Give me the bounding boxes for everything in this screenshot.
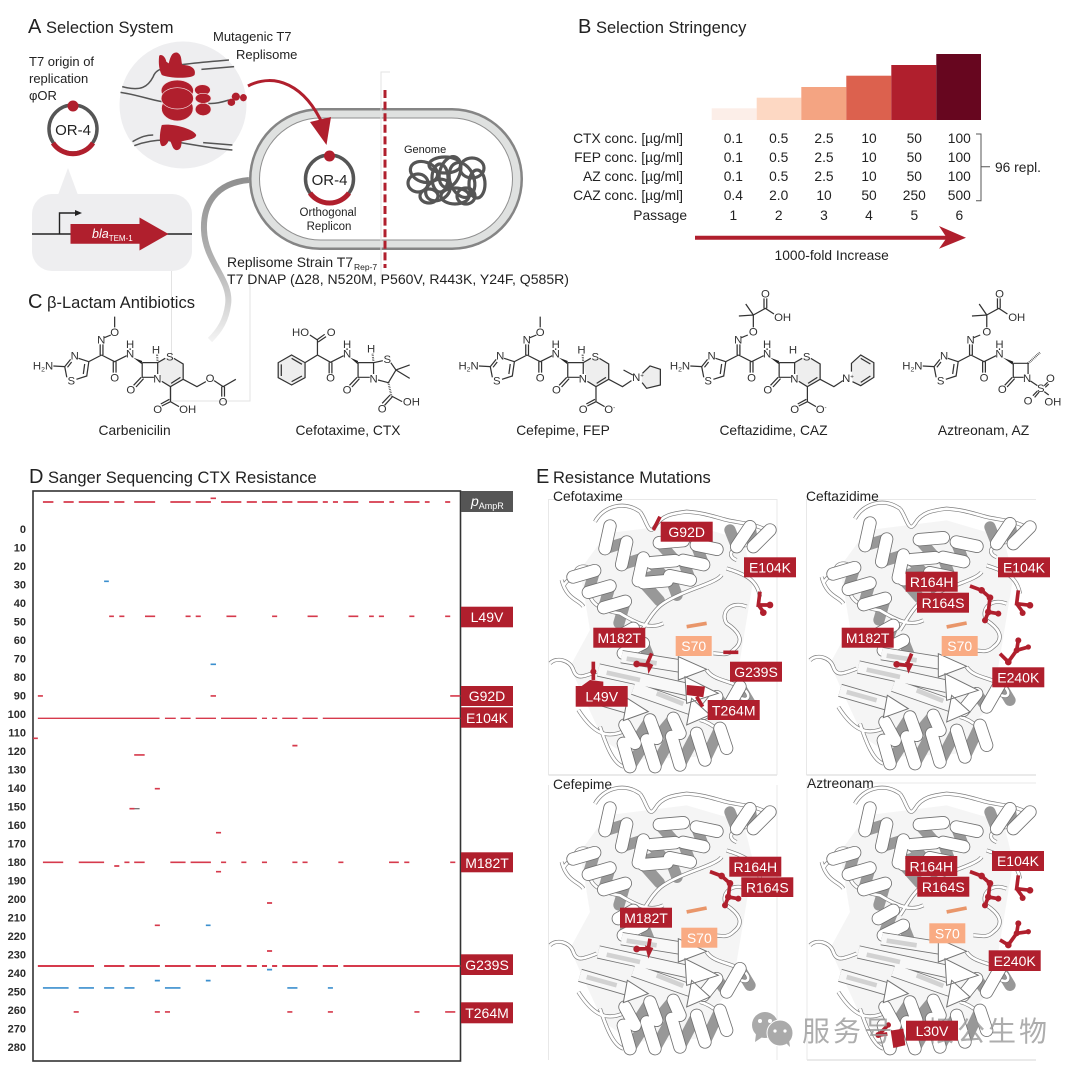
panel: cefepime: [550, 777, 793, 1049]
molecule: aztreonam: H: [902, 361, 910, 373]
molecule: cefepime: O: [552, 385, 561, 397]
molecule: aztreonam: O: [1046, 373, 1055, 385]
molecule: ceftazidime: H: [789, 345, 797, 357]
position axis: 20: [14, 561, 26, 573]
panel E: resistance mutations: [536, 466, 1050, 1060]
molecule: cefotaxime: N: [369, 374, 378, 386]
molecule: carbenicillin: N: [153, 374, 161, 386]
molecule names: Cefepime, FEP: [516, 423, 610, 438]
molecule: cefotaxime: HO: [292, 327, 309, 339]
molecule: carbenicillin: [33, 317, 236, 416]
molecule: cefotaxime: N: [343, 349, 351, 361]
label: T264M: T264M: [465, 1005, 509, 1021]
cell tail: [204, 180, 249, 340]
label: replisome strain: T7 DNAP (Δ28, N520M, P560V, R443K, Y24F, Q585R): [227, 272, 569, 287]
label: mutagenic T7 replisome: Replisome: [236, 47, 297, 62]
icon: OR-4 orthogonal replicon: [306, 150, 354, 203]
labels: T264M: [712, 702, 755, 718]
position axis: 0: [20, 524, 26, 536]
molecule: cefepime: O: [604, 404, 613, 416]
molecule names: Carbenicilin: [99, 423, 171, 438]
table: concentrations: 0.5: [769, 131, 789, 146]
labels: E240K: [997, 670, 1040, 686]
table: concentrations: 100: [948, 169, 971, 184]
molecule names: Ceftazidime, CAZ: [719, 423, 828, 438]
table: concentrations: 50: [907, 169, 922, 184]
subheading: Cefepime: [553, 777, 612, 792]
molecule: cefepime: S: [592, 351, 599, 363]
molecule: ceftazidime: +: [850, 374, 854, 381]
position axis: [8, 524, 26, 1054]
molecule: carbenicillin: H: [152, 345, 160, 357]
protein ribbon: [550, 788, 773, 1049]
subheading: Ceftazidime: [806, 489, 879, 504]
labels: M182T: [598, 630, 642, 646]
molecule: ceftazidime: N: [842, 373, 850, 385]
table: concentrations: 3: [820, 208, 828, 223]
molecule: carbenicillin: N: [126, 349, 134, 361]
cell outline: [249, 108, 523, 250]
table: concentrations: 100: [948, 150, 971, 165]
heading E: E: [536, 466, 549, 488]
labels: S70: [681, 638, 706, 654]
molecule: ceftazidime: O: [790, 404, 799, 416]
position axis: 50: [14, 616, 26, 628]
molecule: ceftazidime: N: [708, 351, 716, 363]
molecule: carbenicillin: N: [45, 361, 53, 373]
label: T264M: [461, 1002, 513, 1023]
labels: [620, 857, 793, 948]
heading C: C: [28, 291, 42, 313]
molecule: carbenicillin: OH: [179, 404, 196, 416]
heading D: D: [29, 466, 43, 488]
position axis: 180: [8, 857, 26, 869]
molecule: carbenicillin: H: [126, 339, 134, 351]
label: orthogonal replicon: [300, 207, 356, 233]
molecule: cefotaxime: S: [384, 354, 391, 366]
molecule: cefotaxime: O: [326, 372, 335, 384]
molecule: cefepime: N: [552, 349, 560, 361]
arrow: replisome to replicon: [248, 81, 331, 145]
molecule: aztreonam: [902, 289, 1061, 408]
molecule: cefotaxime: H: [367, 344, 375, 356]
heading B: B: [578, 16, 591, 38]
heading C: β-Lactam Antibiotics: [47, 294, 195, 312]
molecule: ceftazidime: 2: [678, 367, 682, 374]
labels: L30V: [916, 1023, 949, 1039]
table: concentrations: 1: [729, 208, 737, 223]
labels: G92D: [668, 524, 705, 540]
molecule: cefepime: N: [471, 361, 479, 373]
table: concentrations: CAZ conc. [µg/ml]: [573, 188, 683, 203]
table: concentrations: 50: [907, 131, 922, 146]
panel A: selection system: [28, 16, 569, 401]
heading A: Selection System: [46, 19, 173, 37]
labels: G239S: [734, 664, 778, 680]
molecule: carbenicillin: O: [153, 404, 162, 416]
molecule: ceftazidime: N: [790, 374, 798, 386]
molecule: aztreonam: N: [914, 361, 923, 373]
icon: genome tangle: [407, 154, 485, 205]
icon: OR-4 replicon small: [49, 100, 97, 154]
label: L49V: L49V: [471, 609, 504, 625]
molecule: cefepime: [458, 317, 660, 416]
subheading: Aztreonam: [807, 776, 874, 791]
molecule: cefepime: H: [552, 339, 560, 351]
molecule names: Aztreonam, AZ: [938, 423, 1029, 438]
molecule: ceftazidime: O: [749, 326, 758, 338]
labels: R164H: [910, 858, 953, 874]
table: concentrations: 250: [903, 188, 926, 203]
molecule: aztreonam: OH: [1044, 396, 1061, 408]
position axis: 230: [8, 950, 26, 962]
labels: R164S: [922, 595, 964, 611]
position axis: 10: [14, 542, 26, 554]
position axis: 220: [8, 931, 26, 943]
panel C: beta-lactam antibiotics: [28, 289, 1061, 438]
bracket: 96 replicates: 96 repl.: [995, 160, 1041, 175]
position axis: 130: [8, 764, 26, 776]
position axis: 140: [8, 783, 26, 795]
molecule: carbenicillin: N: [71, 351, 79, 363]
label: genome: Genome: [404, 144, 446, 156]
molecule: ceftazidime: N: [763, 349, 771, 361]
molecule: ceftazidime: S: [704, 375, 712, 387]
labels: [905, 851, 1044, 1041]
table: concentrations: 10: [816, 188, 832, 203]
label: G239S: [461, 954, 513, 975]
molecule: carbenicillin: S: [67, 375, 75, 387]
label: M182T: [461, 852, 513, 872]
table: concentrations: 2.5: [814, 131, 834, 146]
label: pAmpR: AmpR: [479, 501, 504, 511]
molecule: ceftazidime: [670, 289, 874, 416]
panel: ceftazidime: [806, 489, 1050, 764]
label: G239S: G239S: [465, 957, 509, 973]
position axis: 120: [8, 746, 26, 758]
molecule: carbenicillin: O: [110, 327, 119, 339]
label: mutagenic T7 replisome: Mutagenic T7: [213, 29, 292, 44]
molecule: ceftazidime: H: [763, 339, 771, 351]
position axis: 250: [8, 986, 26, 998]
molecule: cefepime: S: [493, 375, 501, 387]
molecule: ceftazidime: N: [734, 335, 742, 347]
position axis: 210: [8, 912, 26, 924]
labels: R164S: [746, 880, 789, 896]
molecule: carbenicillin: S: [166, 351, 174, 363]
molecule: cefepime: 2: [467, 367, 471, 374]
callout: bla TEM-1 gene: [32, 168, 192, 271]
molecule: aztreonam: O: [995, 289, 1004, 301]
molecule: aztreonam: S: [937, 375, 944, 387]
table: concentrations: [573, 131, 971, 223]
labels: S70: [687, 930, 712, 946]
panel B: selection stringency: [573, 16, 1041, 263]
labels: S70: [947, 638, 972, 654]
position axis: 160: [8, 820, 26, 832]
molecule: ceftazidime: O: [763, 385, 773, 397]
molecule: aztreonam: O: [982, 326, 991, 338]
molecule: cefotaxime: O: [343, 385, 352, 397]
label: E104K: [461, 707, 513, 728]
molecule: aztreonam: N: [940, 351, 948, 363]
table: concentrations: 50: [861, 188, 877, 203]
position axis: 80: [14, 672, 26, 684]
table: concentrations: 500: [948, 188, 971, 203]
protein ribbon: [810, 503, 1033, 764]
label: pAmpR: p: [471, 493, 479, 509]
molecule: cefepime: O: [536, 372, 545, 384]
molecule: aztreonam: O: [980, 372, 989, 384]
molecule: cefepime: H: [458, 361, 467, 373]
table: concentrations: 5: [910, 208, 918, 223]
table: concentrations: 50: [907, 150, 922, 165]
molecule: carbenicillin: O: [219, 396, 228, 408]
position axis: 150: [8, 802, 26, 814]
replisome circle: [120, 42, 247, 168]
molecule: cefepime: N: [523, 335, 531, 347]
molecule: aztreonam: 2: [910, 367, 915, 374]
molecule names: [99, 423, 1029, 438]
molecule: carbenicillin: H: [33, 361, 41, 373]
table: concentrations: AZ conc. [µg/ml]: [583, 169, 683, 184]
labels: M182T: [624, 910, 668, 926]
labels: E104K: [1003, 560, 1046, 576]
labels: [842, 557, 1050, 687]
table: concentrations: 2.0: [769, 188, 789, 203]
table: concentrations: 0.1: [724, 150, 743, 165]
molecule: carbenicillin: O: [206, 373, 215, 385]
label: L49V: [461, 607, 513, 627]
molecule: cefotaxime: [278, 327, 420, 416]
molecule: aztreonam: N: [995, 349, 1004, 361]
table: concentrations: 100: [948, 131, 971, 146]
molecule: cefotaxime: H: [343, 339, 351, 351]
molecule: cefotaxime: O: [327, 327, 336, 339]
molecule: cefotaxime: O: [378, 404, 387, 416]
table: concentrations: 10: [861, 131, 877, 146]
icon: OR-4 replicon small: OR-4: [55, 122, 91, 139]
labels: M182T: [846, 630, 890, 646]
molecule names: Cefotaxime, CTX: [295, 423, 401, 438]
table: concentrations: CTX conc. [µg/ml]: [573, 131, 683, 146]
position axis: 280: [8, 1042, 26, 1054]
label: G92D: [461, 686, 513, 706]
arrow: 1000-fold increase: 1000-fold Increase: [775, 248, 889, 263]
labels: S70: [935, 926, 960, 942]
table: concentrations: FEP conc. [µg/ml]: [574, 150, 683, 165]
table: concentrations: 0.4: [724, 188, 743, 203]
molecule: cefepime: O: [536, 327, 545, 339]
table: concentrations: 10: [861, 169, 877, 184]
chart frame: [33, 491, 460, 1061]
position axis: 100: [8, 709, 26, 721]
heading D: Sanger Sequencing CTX Resistance: [48, 469, 317, 487]
position axis: 110: [8, 728, 26, 740]
molecule: carbenicillin: O: [110, 372, 119, 384]
position axis: 240: [8, 968, 26, 980]
table: concentrations: 4: [865, 208, 873, 223]
label: T7 origin of replication: T7 origin of: [29, 54, 94, 69]
molecule: ceftazidime: -: [825, 405, 827, 412]
position axis: 40: [14, 598, 26, 610]
label: G92D: G92D: [469, 688, 505, 704]
table: concentrations: 0.1: [724, 169, 743, 184]
labels: L49V: [585, 688, 619, 704]
molecule: aztreonam: H: [995, 339, 1004, 351]
table: concentrations: 6: [955, 208, 963, 223]
position axis: 200: [8, 894, 26, 906]
molecule: ceftazidime: S: [803, 351, 810, 363]
icon: OR-4 orthogonal replicon: OR-4: [312, 172, 347, 189]
molecule: aztreonam: O: [998, 384, 1007, 396]
molecule: ceftazidime: O: [761, 289, 770, 301]
molecule: cefepime: O: [579, 404, 588, 416]
label: E104K: E104K: [466, 710, 509, 726]
position axis: 270: [8, 1024, 26, 1036]
table: concentrations: 0.5: [769, 150, 789, 165]
panel: cefotaxime: [550, 489, 796, 767]
table: concentrations: 0.5: [769, 169, 789, 184]
table: concentrations: 2: [775, 208, 783, 223]
molecule: aztreonam: OH: [1008, 312, 1025, 324]
table: concentrations: 2.5: [814, 150, 834, 165]
panel D: Sanger sequencing: [8, 466, 513, 1061]
molecule: ceftazidime: H: [670, 361, 678, 373]
label: T7 origin of replication: [29, 54, 94, 103]
labels: R164S: [922, 879, 965, 895]
molecule: ceftazidime: O: [816, 404, 825, 416]
membrane dashed line: [384, 90, 386, 268]
table: concentrations: 10: [861, 150, 877, 165]
molecule: cefepime: N: [632, 372, 640, 384]
position axis: 260: [8, 1005, 26, 1017]
labels: E104K: [749, 560, 792, 576]
bracket: 96 replicates: [976, 134, 1041, 201]
position axis: 30: [14, 580, 26, 592]
label: T7 origin of replication: φOR: [29, 88, 57, 103]
molecule: carbenicillin: N: [97, 335, 105, 347]
molecule: ceftazidime: N: [682, 361, 690, 373]
panel: aztreonam: [752, 776, 1047, 1050]
molecule: ceftazidime: O: [747, 372, 756, 384]
position axis: 90: [14, 690, 26, 702]
mutation marks: [33, 498, 460, 1012]
position axis: 170: [8, 838, 26, 850]
molecule: cefepime: H: [577, 345, 586, 357]
heading B: Selection Stringency: [596, 19, 747, 37]
protein ribbon: [810, 788, 1033, 1049]
molecule: ceftazidime: OH: [774, 312, 791, 324]
table: concentrations: Passage: [633, 208, 687, 223]
watermark: 服务号·根公生物: [802, 1010, 1047, 1050]
molecule: cefotaxime: OH: [403, 396, 420, 408]
molecule: cefepime: N: [496, 351, 504, 363]
position axis: 190: [8, 876, 26, 888]
position axis: 60: [14, 635, 26, 647]
labels: E104K: [997, 853, 1040, 869]
label: orthogonal replicon: Replicon: [307, 221, 351, 233]
molecule: carbenicillin: 2: [41, 367, 45, 374]
molecule: aztreonam: N: [966, 335, 975, 347]
molecule: carbenicillin: O: [126, 385, 136, 397]
label: replisome strain: Replisome Strain T7: [227, 254, 353, 270]
bar chart: concentration steps: [712, 54, 981, 120]
callout: bla TEM-1 gene: bla: [92, 227, 109, 241]
label: pAmpR: [461, 491, 513, 512]
heading E: Resistance Mutations: [553, 469, 711, 487]
molecule: cefepime: N: [579, 374, 587, 386]
labels: [576, 522, 796, 720]
label: mutagenic T7 replisome: [213, 29, 297, 62]
heading A: A: [28, 16, 42, 38]
label: T7 origin of replication: replication: [29, 71, 88, 86]
table: concentrations: 2.5: [814, 169, 834, 184]
protein ribbon: [550, 506, 773, 767]
position axis: 70: [14, 654, 26, 666]
molecule: cefepime: -: [613, 405, 615, 412]
labels: R164H: [910, 574, 953, 590]
labels: E240K: [994, 953, 1036, 969]
molecule: cefepime: +: [640, 373, 644, 380]
label: M182T: M182T: [465, 855, 509, 871]
labels: R164H: [734, 859, 777, 875]
subheading: Cefotaxime: [553, 489, 623, 504]
molecule: aztreonam: S: [1037, 383, 1045, 395]
molecule: aztreonam: N: [1023, 373, 1031, 385]
label: replisome strain: Rep-7: [354, 262, 377, 272]
label: replisome strain: [227, 254, 569, 287]
molecule: aztreonam: O: [1024, 395, 1033, 407]
table: concentrations: 0.1: [724, 131, 743, 146]
callout: bla TEM-1 gene: TEM-1: [109, 234, 133, 243]
arrow: 1000-fold increase: [695, 226, 966, 263]
label: orthogonal replicon: Orthogonal: [300, 207, 356, 219]
